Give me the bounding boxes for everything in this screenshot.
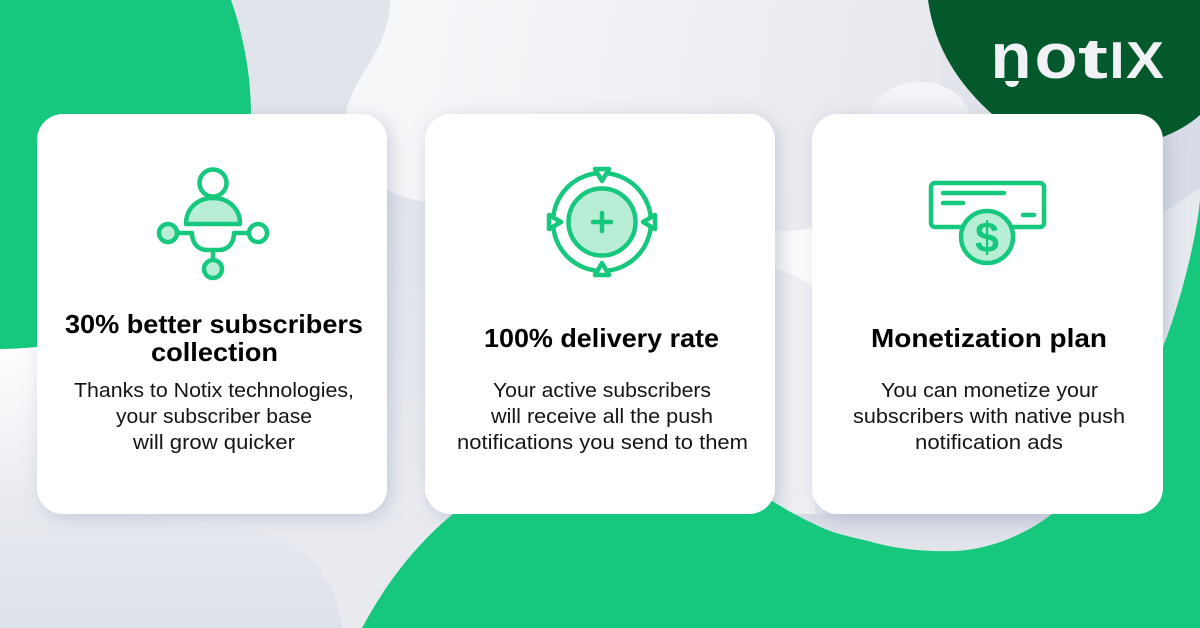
- panel: subscribers collection: [37, 114, 387, 514]
- icon: person network: [159, 170, 267, 278]
- logo: notix: X: [1126, 32, 1164, 90]
- text block: your subscriber base: [116, 406, 312, 428]
- dark green corner shape: [928, 0, 1200, 149]
- icon: bell clapper: [1005, 81, 1019, 87]
- heading: 100% delivery rate: [484, 323, 719, 353]
- green blob: bottom right: [362, 200, 1200, 628]
- text block: You can monetize your: [881, 380, 1098, 402]
- panel: delivery rate: [425, 114, 775, 514]
- text block: will grow quicker: [132, 432, 295, 454]
- text block: Thanks to Notix technologies,: [74, 380, 354, 402]
- icon: target: [549, 169, 655, 275]
- text block: notification ads: [915, 432, 1063, 454]
- text block: notifications you send to them: [457, 432, 748, 454]
- text block: Your active subscribers: [493, 380, 711, 402]
- panel: monetization plan: [812, 114, 1163, 514]
- text block: will receive all the push: [490, 406, 713, 428]
- logo: notix: I: [1110, 32, 1124, 90]
- logo: notix: [990, 20, 1164, 92]
- logo: notix: n: [990, 20, 1032, 92]
- heading: collection: [151, 337, 278, 367]
- text block: subscribers with native push: [853, 406, 1125, 428]
- logo: notix: o: [1034, 20, 1078, 92]
- heading: Monetization plan: [871, 323, 1107, 353]
- logo: notix: t: [1078, 27, 1108, 91]
- icon: cheque with dollar coin: $: [975, 214, 999, 262]
- icon: cheque with dollar coin: [931, 183, 1044, 263]
- heading: 30% better subscribers: [65, 309, 363, 339]
- green blob: top left: [0, 0, 251, 349]
